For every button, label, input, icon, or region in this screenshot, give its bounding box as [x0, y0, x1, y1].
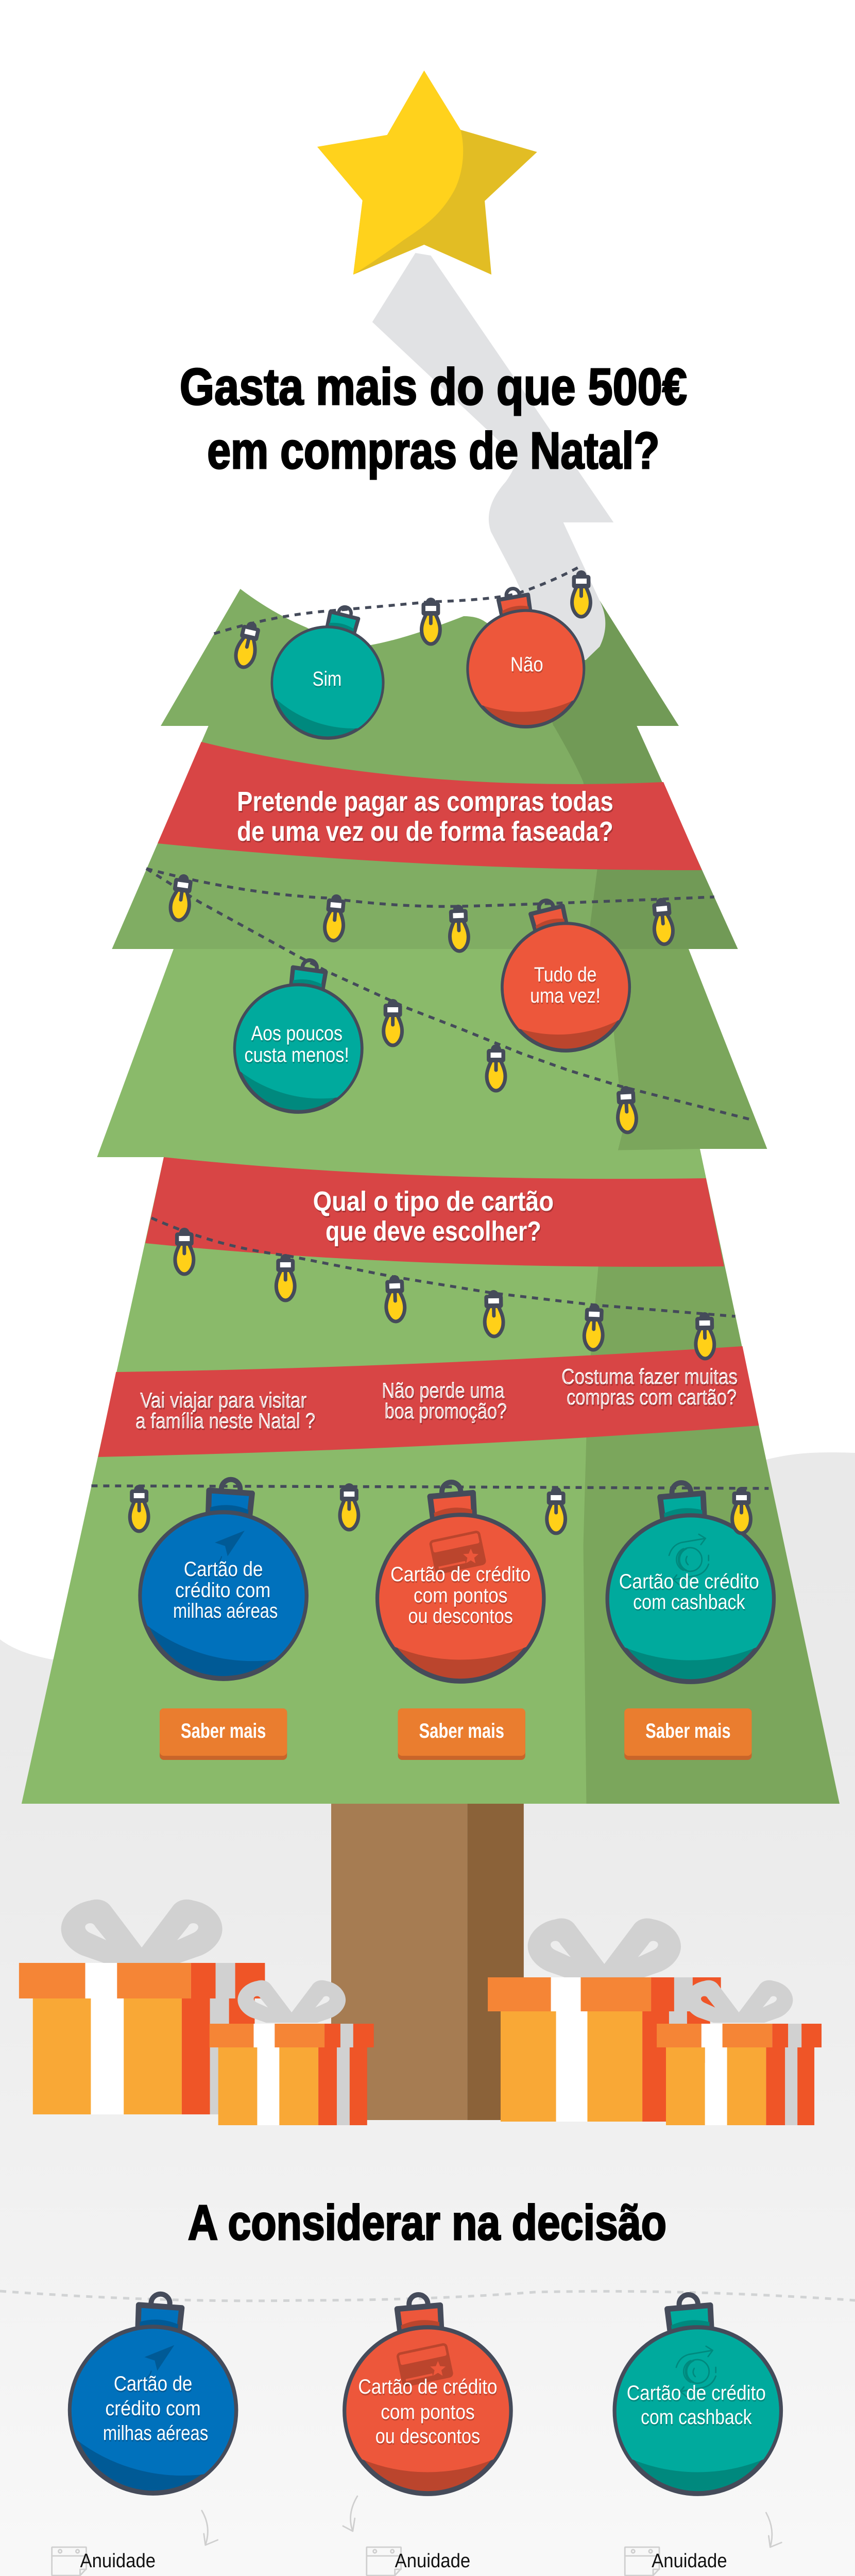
present: small right	[657, 1980, 822, 2125]
list: points card	[367, 2547, 538, 2576]
banner 3 question: card purchases: compras com cartão?	[567, 1385, 737, 1409]
banner 3 question: travel: Vai viajar para visitar	[140, 1388, 306, 1412]
banner 3 question: card purchases	[561, 1364, 738, 1409]
arrow: column 2	[343, 2496, 357, 2531]
ornament: cashback card	[608, 1481, 773, 1682]
lower ornament: cashback card	[615, 2293, 780, 2494]
lower ornament: points card	[345, 2293, 510, 2494]
ornament: Sim	[256, 604, 399, 754]
list: miles card: Anuidade	[80, 2550, 156, 2572]
button: Saber mais 1: Saber mais	[181, 1720, 266, 1742]
string lights 3	[151, 1218, 736, 1359]
ornament: Tudo de uma vez: uma vez!	[530, 985, 601, 1007]
ornament: cashback card: Cartão de crédito	[619, 1570, 759, 1593]
list: points card: Anuidade	[395, 2550, 470, 2572]
present: large right	[488, 1918, 721, 2122]
banner 3 question: promotions: boa promoção?	[385, 1399, 507, 1423]
heading: A considerar na decisão: A considerar na decisão	[188, 2195, 666, 2250]
banner 3 question: promotions	[382, 1378, 507, 1423]
arrow: column 1	[202, 2511, 218, 2545]
list: miles card	[52, 2547, 179, 2576]
ornament: Sim: Sim	[313, 668, 341, 690]
button: Saber mais 3: Saber mais	[645, 1720, 731, 1742]
lower ornament: miles card	[52, 2293, 254, 2512]
banner 3 question: travel: a família neste Natal ?	[135, 1409, 315, 1433]
red banner 3	[98, 1346, 759, 1457]
ornament: points card: Cartão de crédito	[390, 1563, 531, 1586]
bulb over cashback ornament	[732, 1487, 750, 1533]
present: small left	[210, 1980, 374, 2125]
lower ornament: cashback card: com cashback	[641, 2406, 752, 2429]
title: Gasta mais do que 500€	[180, 359, 687, 416]
icon: calendar	[625, 2547, 659, 2575]
ornament: miles card: milhas aéreas	[173, 1600, 278, 1622]
icon: calendar	[52, 2547, 86, 2575]
arrow: column 3	[766, 2513, 781, 2547]
tree tier 3	[97, 949, 767, 1180]
lower ornament: points card: com pontos	[381, 2401, 475, 2424]
ornament: miles card: Cartão de	[184, 1558, 263, 1581]
string lights 2	[146, 869, 753, 1133]
tree tier 1	[161, 589, 679, 726]
trunk	[331, 1804, 524, 2120]
ornament: points card: ou descontos	[408, 1605, 513, 1628]
ornament: Aos poucos custa menos: custa menos!	[245, 1044, 349, 1066]
lower ornament: miles card: crédito com	[105, 2397, 201, 2420]
button: Saber mais 1	[160, 1708, 287, 1760]
string lights 1	[214, 565, 590, 669]
ornament: Não	[465, 586, 587, 730]
list: cashback card: Anuidade	[652, 2550, 727, 2572]
star tree topper	[317, 71, 537, 275]
ornament: Tudo de uma vez	[498, 897, 635, 1056]
button: Saber mais 2	[398, 1708, 525, 1760]
present: large left	[19, 1900, 265, 2114]
lower ornament: miles card: milhas aéreas	[103, 2422, 208, 2445]
red banner 2: Qual o tipo de cartão	[313, 1186, 554, 1217]
lower ornament: points card: ou descontos	[375, 2425, 480, 2448]
ornament: Tudo de uma vez: Tudo de	[534, 963, 596, 986]
banner 3 question: travel	[135, 1388, 315, 1433]
lower ornament: cashback card: Cartão de crédito	[627, 2382, 766, 2404]
string lights 4	[91, 1483, 768, 1533]
red banner 2	[145, 1157, 724, 1267]
grey string	[0, 2291, 855, 2301]
ornament: Aos poucos custa menos: Aos poucos	[251, 1022, 343, 1045]
tree tier 4	[22, 1149, 840, 1804]
banner 3 question: card purchases: Costuma fazer muitas	[561, 1364, 738, 1388]
title: em compras de Natal?	[207, 422, 660, 480]
banner 3 question: promotions: Não perde uma	[382, 1378, 505, 1402]
background hills and floor	[0, 1452, 855, 2576]
button: Saber mais 2: Saber mais	[419, 1720, 504, 1742]
ornament: miles card	[122, 1478, 324, 1697]
red banner 2: que deve escolher?	[326, 1216, 541, 1247]
button: Saber mais 3	[624, 1708, 751, 1760]
ornament: cashback card: com cashback	[633, 1591, 745, 1614]
tree tier 2	[112, 725, 738, 949]
grey path behind tree top	[372, 253, 613, 660]
ornament: points card	[378, 1480, 543, 1681]
ornament: miles card: crédito com	[175, 1579, 270, 1602]
list: cashback card	[624, 2547, 814, 2576]
lower ornament: points card: Cartão de crédito	[358, 2376, 497, 2398]
ornament: Aos poucos custa menos	[221, 958, 376, 1126]
red banner 1: de uma vez ou de forma faseada?	[237, 816, 613, 847]
ornament: Não: Não	[510, 653, 543, 676]
red banner 1	[158, 742, 702, 870]
lower ornament: miles card: Cartão de	[114, 2372, 192, 2395]
title	[180, 359, 687, 480]
red banner 1: Pretende pagar as compras todas	[237, 786, 613, 817]
ornament: points card: com pontos	[414, 1584, 507, 1607]
icon: calendar	[367, 2547, 401, 2575]
